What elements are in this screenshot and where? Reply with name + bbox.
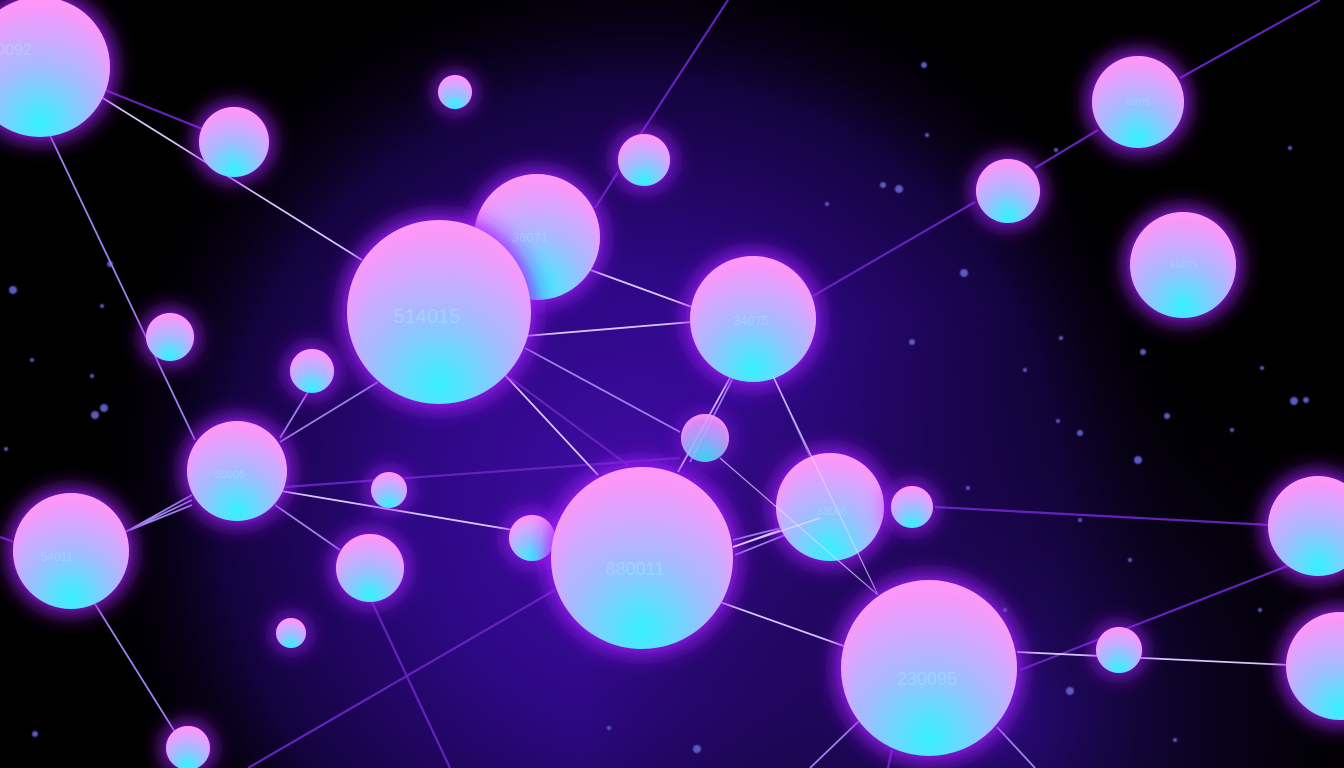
sphere: 880011: [546, 462, 738, 654]
sphere: [506, 512, 558, 564]
sphere: [274, 616, 308, 650]
sphere: [143, 310, 197, 364]
sphere: right edge: [1264, 472, 1344, 580]
sphere: [1126, 208, 1240, 322]
sphere: behind largest: [470, 170, 604, 304]
sphere: [888, 483, 936, 531]
sphere: [333, 531, 407, 605]
sphere: 54011: [9, 489, 133, 613]
sphere: [436, 73, 474, 111]
sphere: 33005: 33005: [817, 506, 847, 518]
sphere: 34075: 34075: [733, 313, 769, 328]
sphere: 33005: [720, 376, 888, 595]
sphere: [615, 131, 673, 189]
sphere: 514015: 514015: [394, 306, 460, 328]
sphere: 880011: 880011: [606, 559, 664, 579]
sphere: 230095: 230095: [897, 669, 957, 689]
sphere: [287, 346, 337, 396]
sphere: [163, 723, 213, 768]
sphere: [1088, 52, 1188, 152]
sphere: 230095: [836, 575, 1022, 761]
sphere: [973, 156, 1043, 226]
sphere: 514015: [342, 215, 536, 409]
sphere: 54011: 54011: [41, 550, 74, 564]
sphere: 50005: 50005: [215, 469, 245, 481]
sphere: 34075: [686, 252, 820, 386]
sphere: [369, 470, 409, 510]
sphere: [680, 413, 730, 463]
sphere: [196, 104, 272, 180]
sphere: top left: [0, 0, 114, 141]
sphere: 85075: [1170, 260, 1198, 271]
sphere: 50005: [183, 417, 291, 525]
label: 36071: 36071: [512, 230, 548, 245]
sphere: 80075: [1125, 97, 1151, 107]
sphere: [1094, 625, 1144, 675]
sphere: lower right edge: [1282, 608, 1344, 724]
